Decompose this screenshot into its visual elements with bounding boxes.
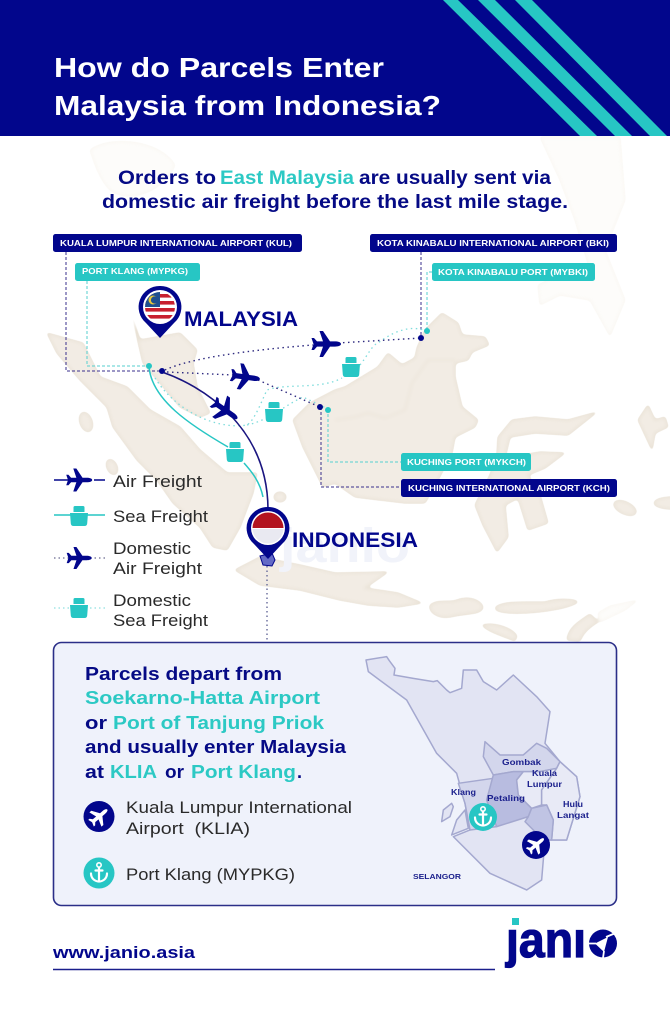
panel text: and usually enter Malaysia <box>85 737 347 757</box>
website link: www.janio.asia <box>52 943 196 962</box>
legend: domestic air freight <box>54 539 202 578</box>
label: Kuching port <box>401 453 531 471</box>
legend: sea freight <box>54 506 208 526</box>
map: Selangor: Petaling <box>487 793 525 803</box>
title: Malaysia from Indonesia? <box>54 90 441 121</box>
legend: air freight <box>54 469 202 491</box>
panel text: Parcels depart from <box>85 664 282 684</box>
subheading <box>102 168 568 213</box>
icon: airport marker <box>522 831 550 859</box>
legend: sea freight: Sea Freight <box>113 507 208 526</box>
panel text: Port Klang <box>191 762 296 782</box>
watermark: janio <box>279 520 410 573</box>
connector lines from labels <box>66 252 432 487</box>
key: Port Klang: Port Klang (MYPKG) <box>126 865 295 884</box>
map: Selangor: Kuala <box>532 768 557 778</box>
label: Kuching airport: KUCHING INTERNATIONAL AIRPORT (KCH) <box>408 483 610 493</box>
legend: domestic sea freight: Sea Freight <box>113 611 208 630</box>
icon: ship, Sabah route <box>342 357 360 377</box>
country label: Indonesia: INDONESIA <box>292 529 418 552</box>
route: domestic air freight <box>165 338 421 407</box>
subheading: are usually sent via <box>359 168 551 189</box>
panel text: at <box>85 762 104 782</box>
icon: ship, Sarawak route <box>265 402 283 422</box>
map: land masses <box>47 137 670 641</box>
map: Selangor: Klang <box>451 787 476 797</box>
label: BKI airport: KOTA KINABALU INTERNATIONAL AIRPORT (BKI) <box>377 238 609 248</box>
panel: parcel entry details <box>54 642 616 906</box>
title: How do Parcels Enter <box>54 52 384 83</box>
key: KLIA <box>84 798 352 838</box>
key: KLIA: Kuala Lumpur International <box>126 798 352 817</box>
label: Port Klang <box>75 263 200 281</box>
route: domestic sea freight <box>155 328 426 426</box>
legend <box>54 469 208 630</box>
panel text: or <box>85 713 107 733</box>
route: air freight <box>162 372 268 510</box>
label: Kuching port: KUCHING PORT (MYKCH) <box>407 457 526 467</box>
dotted link to panel <box>266 566 268 642</box>
legend: domestic sea freight <box>54 591 208 630</box>
map: Selangor <box>366 657 589 890</box>
label: Kota Kinabalu port: KOTA KINABALU PORT (MYBKI) <box>438 267 588 277</box>
icon: ship, Indonesia route <box>226 442 244 462</box>
subheading: Orders to <box>118 168 216 189</box>
icon: anchor marker <box>469 803 497 831</box>
subheading: East Malaysia <box>220 168 354 189</box>
marker: Jakarta <box>260 553 275 566</box>
panel text: KLIA <box>110 762 157 782</box>
panel text: . <box>297 762 302 782</box>
label: KUL airport <box>53 234 302 252</box>
key: KLIA: Airport (KLIA) <box>126 819 250 838</box>
pin: Malaysia <box>139 286 181 338</box>
icon: plane, Malaysia to Sarawak <box>229 362 262 392</box>
panel text <box>85 664 347 782</box>
key: Port Klang <box>84 858 295 888</box>
label: BKI airport <box>370 234 617 252</box>
map: Selangor: SELANGOR <box>413 872 462 881</box>
map: Selangor: Hulu <box>563 799 583 809</box>
header banner <box>0 0 670 136</box>
country label: Malaysia: MALAYSIA <box>184 308 298 331</box>
legend: air freight: Air Freight <box>113 472 202 491</box>
panel text: Port of Tanjung Priok <box>113 713 325 733</box>
icon: plane, Malaysia to Sabah <box>312 331 341 357</box>
map: Selangor: Gombak <box>502 757 541 767</box>
label: Port Klang: PORT KLANG (MYPKG) <box>82 266 188 276</box>
route: sea freight <box>149 367 263 497</box>
subheading: domestic air freight before the last mile stage. <box>102 192 568 213</box>
footer rule <box>53 968 495 970</box>
icon: plane, Indonesia to Malaysia <box>203 389 247 431</box>
route nodes <box>146 328 430 413</box>
title <box>54 52 441 121</box>
legend: domestic sea freight: Domestic <box>113 591 192 610</box>
legend: domestic air freight: Domestic <box>113 539 192 558</box>
legend: domestic air freight: Air Freight <box>113 559 202 578</box>
map: Selangor: Langat <box>557 810 589 820</box>
logo: janio: jani <box>505 912 586 968</box>
label: KUL airport: KUALA LUMPUR INTERNATIONAL AIRPORT (KUL) <box>60 238 292 248</box>
panel text: Soekarno-Hatta Airport <box>85 688 320 708</box>
label: Kota Kinabalu port <box>432 263 595 281</box>
map: Selangor: Lumpur <box>527 779 563 789</box>
label: Kuching airport <box>401 479 617 497</box>
pin: Indonesia <box>247 507 289 559</box>
panel text: or <box>165 762 184 782</box>
